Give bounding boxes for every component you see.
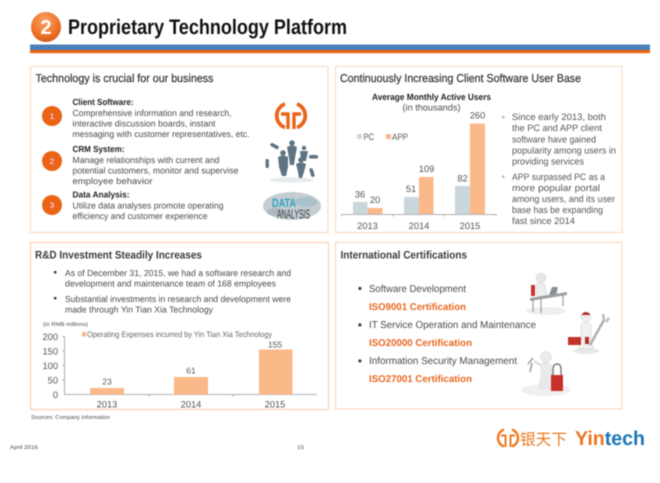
panel heading: Continuously Increasing Client Software User Base bbox=[340, 73, 581, 85]
number badge 1 bbox=[42, 106, 62, 126]
bar chart: operating expenses: 50 bbox=[48, 376, 58, 386]
legend: Operating Expenses incurred by Yin Tian Xia Technology bbox=[87, 330, 272, 339]
crm system text bbox=[72, 144, 239, 186]
bar chart: monthly active users: 2013 bbox=[357, 221, 378, 231]
panel: user base bbox=[336, 66, 622, 232]
bar chart: operating expenses: 2015 bbox=[265, 400, 285, 410]
bar chart: monthly active users: 2015 bbox=[460, 221, 480, 231]
bar chart: monthly active users: 2014 bbox=[409, 221, 429, 231]
section header bbox=[30, 12, 650, 53]
r&d bullets: development and maintenance team of 168 employees bbox=[65, 278, 277, 288]
panel: r&d investment bbox=[30, 242, 328, 410]
number badge 2: 2 bbox=[50, 157, 55, 166]
icon: data analysis word cloud bbox=[263, 192, 321, 222]
certification list: ISO20000 Certification bbox=[369, 338, 472, 349]
commentary bullets: among users, and its user bbox=[512, 194, 615, 204]
legend: APP bbox=[392, 132, 408, 142]
data analysis text: efficiency and customer experience bbox=[72, 211, 208, 221]
bar chart: monthly active users: 51 bbox=[406, 184, 416, 194]
client software text: interactive discussion boards, instant bbox=[72, 118, 216, 128]
crm system text: CRM System: bbox=[72, 144, 125, 154]
icon: data analysis word cloud: DATA bbox=[272, 196, 296, 210]
icon: people group bbox=[266, 140, 318, 182]
bar chart: operating expenses: 0 bbox=[53, 390, 58, 400]
icon: data analysis word cloud: ANALYSIS bbox=[277, 206, 310, 222]
bar chart: operating expenses: 150 bbox=[42, 346, 58, 356]
logo mark bbox=[498, 430, 518, 447]
icon: figure at desk bbox=[526, 273, 567, 315]
bar chart: monthly active users: 82 bbox=[457, 174, 468, 184]
bar chart: operating expenses: 61 bbox=[186, 366, 196, 376]
r&d bullets: Substantial investments in research and development were bbox=[65, 294, 291, 304]
number badge 3: 3 bbox=[50, 201, 55, 210]
r&d bullets: As of December 31, 2015, we had a software research and bbox=[65, 268, 291, 278]
chart title bbox=[372, 92, 491, 112]
panel heading: Technology is crucial for our business bbox=[36, 73, 214, 85]
commentary bullets: providing services bbox=[512, 156, 584, 166]
bar chart: monthly active users: 36 bbox=[355, 190, 365, 200]
footer date: April 2016 bbox=[10, 445, 38, 451]
bar chart: operating expenses: (in RMB millions) bbox=[43, 322, 88, 328]
commentary bullets: base has be expanding bbox=[512, 205, 603, 215]
client software text: Client Software: bbox=[72, 97, 134, 107]
page number: 15 bbox=[297, 445, 304, 451]
panel: certifications bbox=[336, 242, 622, 409]
crm system text: employee behavior bbox=[72, 176, 153, 186]
bar chart: operating expenses: 23 bbox=[102, 376, 112, 386]
bar chart: operating expenses: 2014 bbox=[181, 400, 201, 410]
certification list: ISO27001 Certification bbox=[369, 374, 472, 385]
commentary bullets: popularity among users in bbox=[512, 146, 616, 156]
commentary bullets: APP surpassed PC as a bbox=[512, 172, 606, 182]
logo chinese name: 银天下 bbox=[520, 426, 567, 450]
bar chart: operating expenses: 155 bbox=[268, 340, 282, 350]
crm system text: potential customers, monitor and supervise bbox=[72, 166, 239, 176]
section number badge bbox=[31, 12, 61, 42]
crm system text: Manage relationships with current and bbox=[72, 155, 220, 165]
source note: Sources: Company information bbox=[31, 415, 110, 421]
bar chart: operating expenses: 200 bbox=[42, 332, 58, 342]
r&d bullets: made through Yin Tian Xia Technology bbox=[65, 304, 214, 314]
certification list: Software Development bbox=[369, 284, 466, 295]
r&d bullets bbox=[54, 268, 291, 314]
data analysis text: Data Analysis: bbox=[72, 190, 130, 200]
client software text: messaging with customer representatives, etc. bbox=[72, 129, 250, 139]
icon: figure with wrench bbox=[568, 312, 609, 354]
logo wordmark: Yintech bbox=[575, 428, 645, 450]
icon: figure with padlock bbox=[521, 352, 571, 396]
bar chart: operating expenses: 100 bbox=[42, 361, 58, 371]
commentary bullets: the PC and APP client bbox=[512, 123, 602, 133]
panel: technology bbox=[30, 66, 328, 232]
certification list bbox=[358, 284, 536, 385]
commentary bullets bbox=[502, 112, 616, 226]
number badge 1: 1 bbox=[50, 112, 55, 121]
company logo bbox=[498, 426, 645, 450]
number badge 3 bbox=[42, 195, 62, 215]
client software text: Comprehensive information and research, bbox=[72, 108, 232, 118]
number badge 2 bbox=[42, 151, 62, 171]
legend bbox=[357, 132, 408, 142]
client software text bbox=[72, 97, 250, 139]
bar chart: monthly active users bbox=[342, 110, 496, 231]
panel heading: International Certifications bbox=[340, 250, 467, 262]
legend: PC bbox=[364, 132, 374, 142]
title: Proprietary Technology Platform bbox=[68, 16, 347, 39]
bar chart: monthly active users: 20 bbox=[370, 195, 380, 205]
commentary bullets: software have gained bbox=[512, 134, 596, 144]
certification list: ISO9001 Certification bbox=[369, 302, 466, 313]
certification list: IT Service Operation and Maintenance bbox=[369, 320, 536, 331]
commentary bullets: Since early 2013, both bbox=[512, 112, 606, 122]
data analysis text: Utilize data analyses promote operating bbox=[72, 200, 224, 210]
chart title: (in thousands) bbox=[402, 102, 460, 112]
certification list: Information Security Management bbox=[369, 356, 517, 367]
commentary bullets: fast since 2014 bbox=[512, 216, 575, 226]
bar chart: operating expenses bbox=[42, 322, 317, 410]
bar chart: operating expenses: 2013 bbox=[97, 400, 117, 410]
icon: yintech logo bbox=[277, 104, 305, 129]
bar chart: monthly active users: 260 bbox=[470, 110, 485, 120]
section number badge: 2 bbox=[40, 17, 52, 39]
panel heading: R&D Investment Steadily Increases bbox=[35, 250, 202, 262]
commentary bullets: more popular portal bbox=[512, 183, 600, 193]
chart title: Average Monthly Active Users bbox=[372, 92, 491, 102]
data analysis text bbox=[72, 190, 224, 221]
bar chart: monthly active users: 109 bbox=[419, 164, 434, 174]
header rule bbox=[30, 44, 650, 53]
